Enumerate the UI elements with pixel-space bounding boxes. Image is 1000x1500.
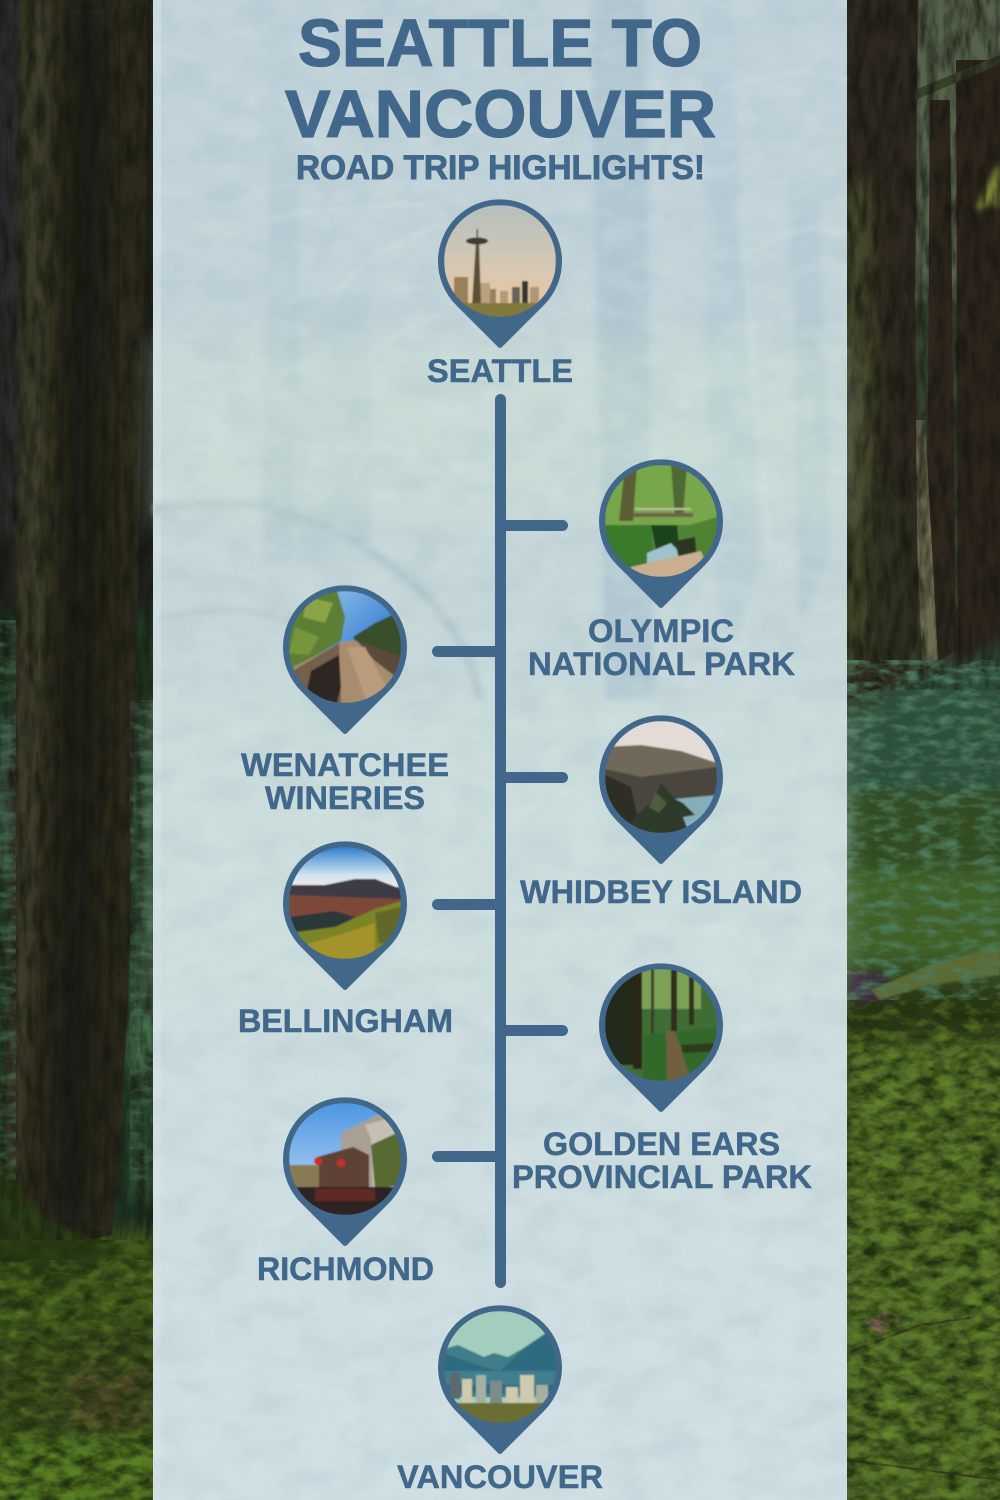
label: Olympic National Park: NATIONAL PARK (528, 646, 795, 682)
label: Whidbey Island: WHIDBEY ISLAND (520, 874, 802, 910)
label: Wenatchee Wineries (241, 747, 449, 816)
right forest strip (847, 0, 1000, 700)
textures (0, 0, 153, 1240)
pin: Whidbey Island (599, 715, 723, 864)
label: Golden Ears Provincial Park: PROVINCIAL PARK (512, 1159, 812, 1195)
pin: Bellingham (283, 841, 407, 990)
label: Bellingham: BELLINGHAM (238, 1003, 453, 1039)
title: ROAD TRIP HIGHLIGHTS! (296, 149, 705, 187)
label: Golden Ears Provincial Park (512, 1126, 812, 1195)
label: Golden Ears Provincial Park: GOLDEN EARS (543, 1126, 780, 1162)
pin: Richmond (283, 1097, 407, 1246)
pin: Wenatchee Wineries (283, 585, 407, 734)
timeline route line with branches (432, 394, 568, 1288)
title: VANCOUVER (285, 77, 716, 152)
title: SEATTLE TO (298, 6, 702, 81)
label: Wenatchee Wineries: WENATCHEE (241, 747, 449, 783)
left tree trunk (4, 0, 148, 1245)
translucent central panel (153, 0, 847, 1500)
label: Olympic National Park (528, 613, 795, 682)
label: Richmond: RICHMOND (257, 1251, 434, 1287)
label: Seattle: SEATTLE (427, 353, 573, 389)
label: Olympic National Park: OLYMPIC (588, 613, 734, 649)
pin: Golden Ears Provincial Park (599, 963, 723, 1112)
label: Wenatchee Wineries: WINERIES (265, 780, 425, 816)
label: Vancouver: VANCOUVER (397, 1459, 603, 1495)
pin: Seattle (438, 199, 562, 348)
pin: Olympic National Park (599, 459, 723, 608)
pin: Vancouver (438, 1305, 562, 1454)
title (285, 6, 716, 187)
